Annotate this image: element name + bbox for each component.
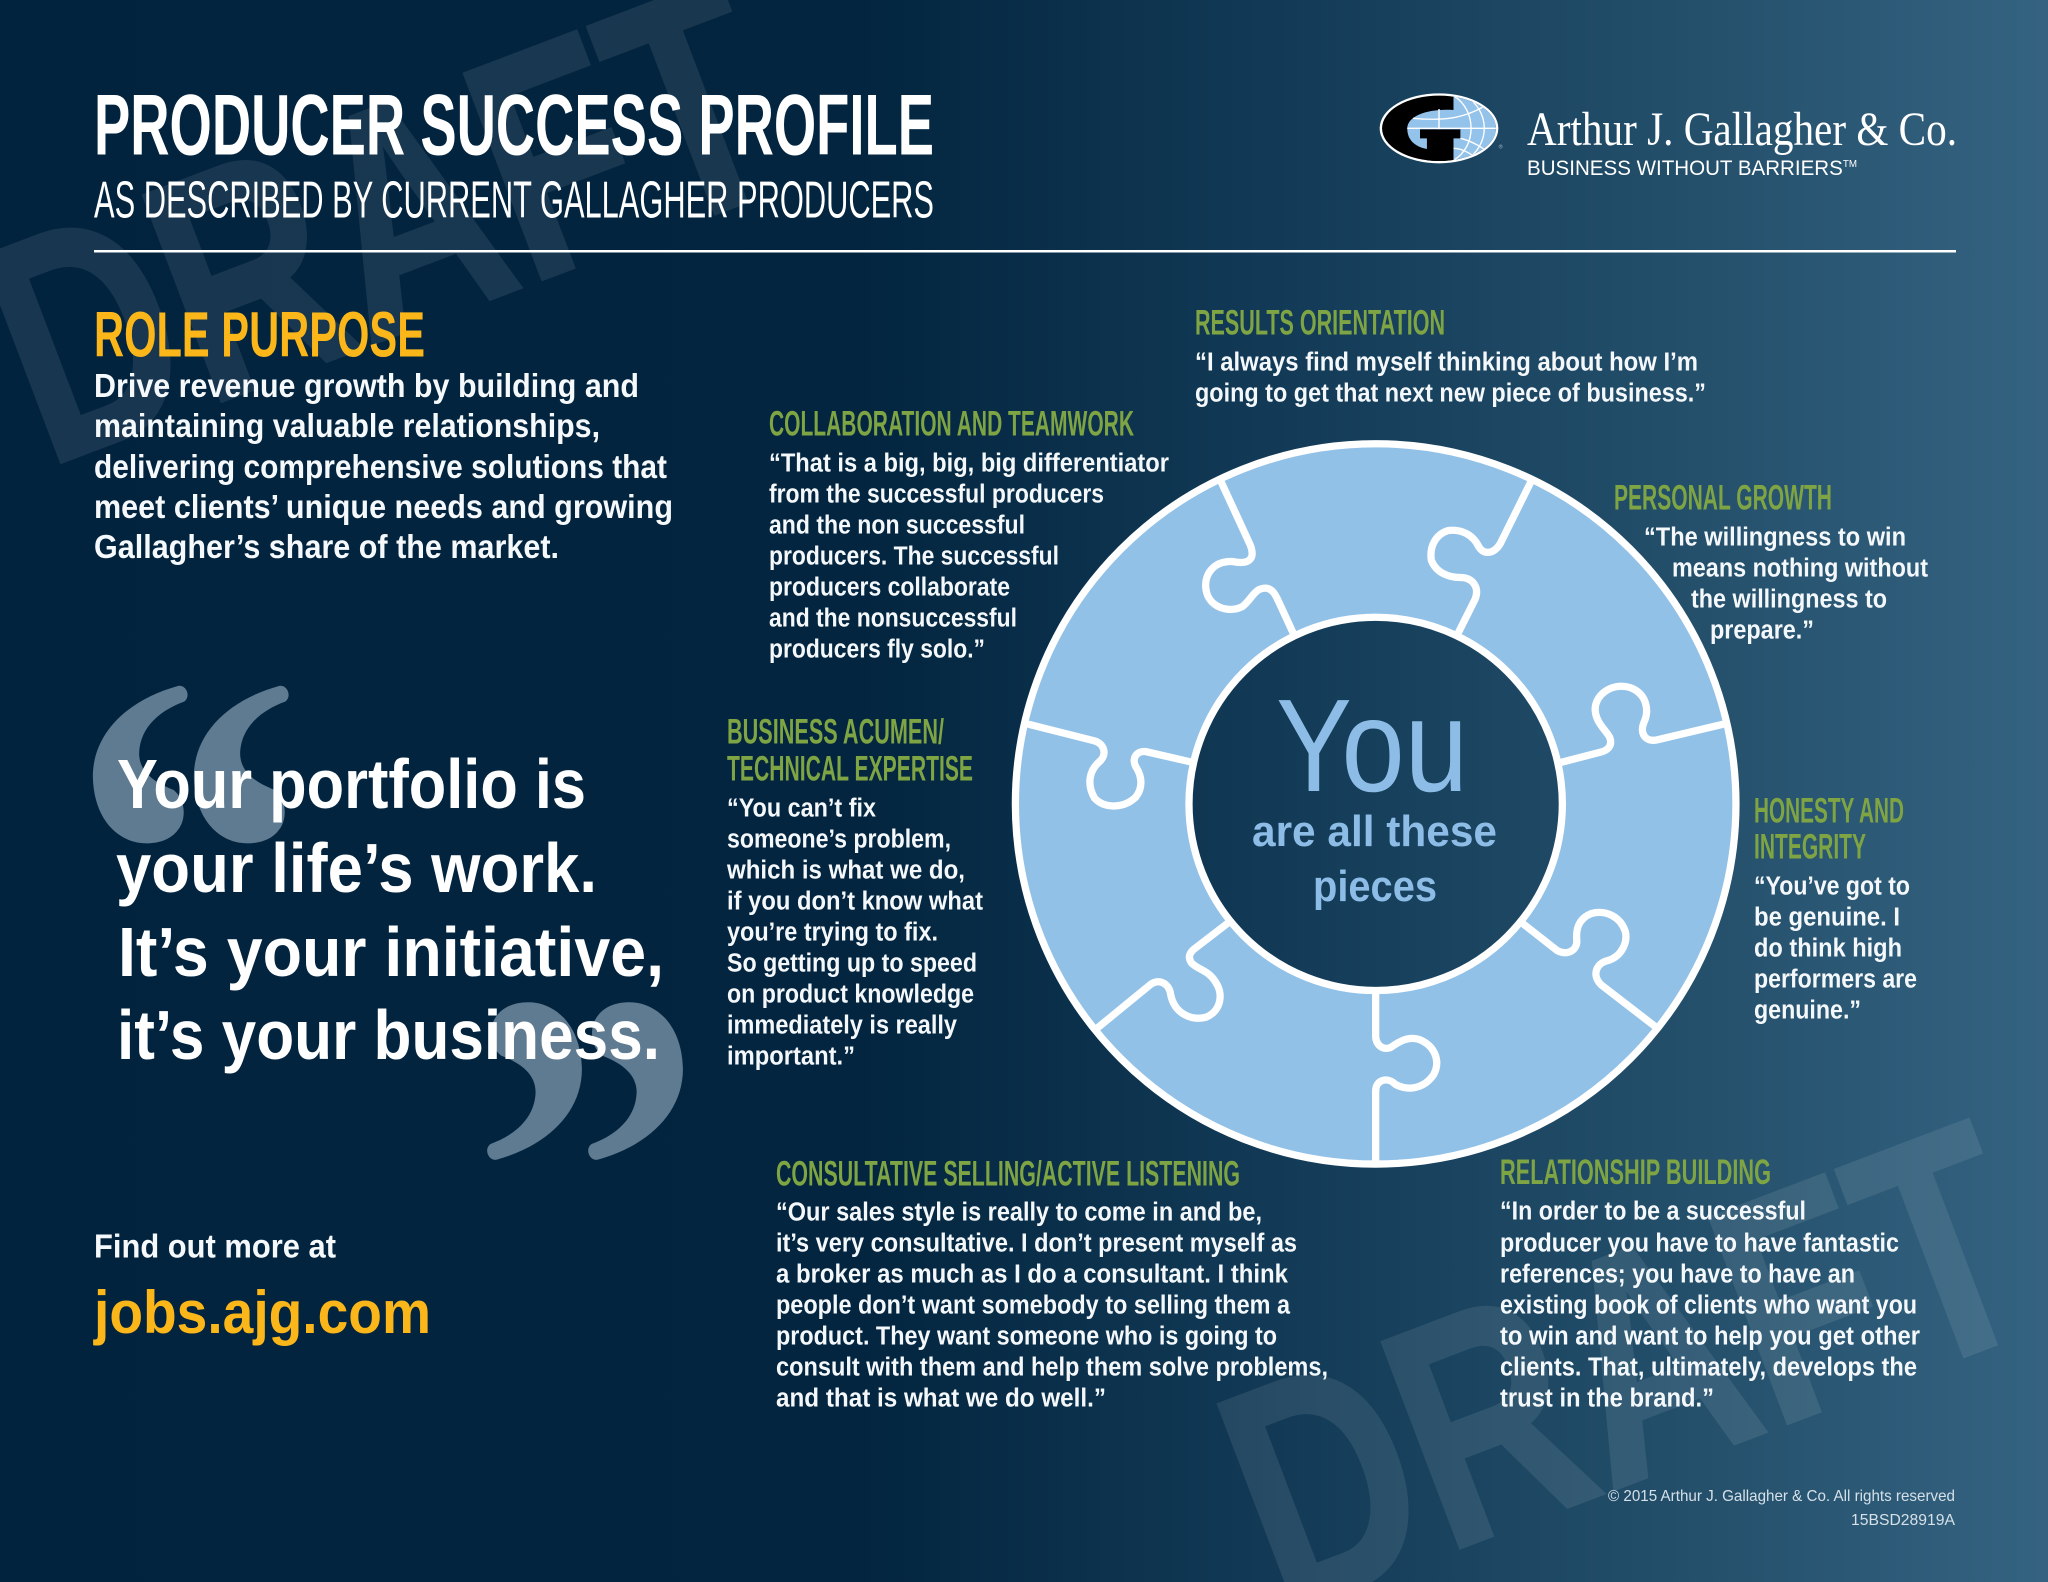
quote: prepare.” <box>1710 616 1814 644</box>
quote text <box>116 745 664 1074</box>
are all these: are all these <box>1252 807 1497 856</box>
quote <box>726 794 983 1070</box>
role purpose text: delivering comprehensive solutions that <box>94 448 667 485</box>
role purpose text: meet clients’ unique needs and growing <box>94 488 673 525</box>
quote: you’re trying to fix. <box>727 918 938 946</box>
icon: closing quote mark <box>487 1002 683 1160</box>
quote: producers. The successful <box>769 542 1059 570</box>
quote: which is what we do, <box>726 856 965 884</box>
tagline: TM <box>1843 159 1857 170</box>
panel: business acumen <box>726 712 983 1070</box>
panel: relationship building <box>1500 1153 1920 1412</box>
you: You <box>1276 672 1468 819</box>
document code: 15BSD28919A <box>1851 1512 1955 1529</box>
quote: on product knowledge <box>727 980 974 1008</box>
quote: from the successful producers <box>769 480 1104 508</box>
tagline: BUSINESS WITHOUT BARRIERS <box>1527 157 1850 180</box>
quote: a broker as much as I do a consultant. I think <box>776 1260 1289 1288</box>
heading: CONSULTATIVE SELLING/ACTIVE LISTENING <box>776 1154 1240 1194</box>
panel: honesty and integrity <box>1754 792 1917 1024</box>
center text <box>1252 672 1497 911</box>
ring pieces <box>1015 444 1736 1164</box>
subtitle: AS DESCRIBED BY CURRENT GALLAGHER PRODUCERS <box>94 172 934 230</box>
quote: to win and want to help you get other <box>1500 1322 1920 1350</box>
website link: jobs.ajg.com <box>93 1279 431 1346</box>
quote <box>776 1198 1328 1412</box>
icon: G globe mark: ® <box>1499 143 1503 150</box>
role purpose text <box>94 367 673 565</box>
heading <box>727 712 973 788</box>
quote: and the non successful <box>769 511 1025 539</box>
heading: BUSINESS ACUMEN/ <box>727 712 944 752</box>
quote: “That is a big, big, big differentiator <box>769 449 1169 477</box>
quote: “You can’t fix <box>727 794 876 822</box>
quote: “You’ve got to <box>1754 872 1910 900</box>
quote: So getting up to speed <box>727 949 977 977</box>
quote <box>1195 348 1706 407</box>
panel: results orientation <box>1195 304 1706 407</box>
pieces: pieces <box>1313 862 1437 911</box>
panel: pull quote <box>93 686 683 1160</box>
quote: people don’t want somebody to selling them a <box>776 1291 1291 1319</box>
puzzle ring <box>1015 444 1736 1164</box>
quote: “Our sales style is really to come in and be, <box>776 1198 1262 1226</box>
quote: important.” <box>727 1042 855 1070</box>
quote: do think high <box>1754 934 1902 962</box>
quote: performers are <box>1754 965 1917 993</box>
quote: means nothing without <box>1672 554 1928 582</box>
quote: producers fly solo.” <box>769 635 985 663</box>
panel: consultative selling <box>776 1154 1328 1412</box>
heading: TECHNICAL EXPERTISE <box>727 750 973 788</box>
role purpose text: Drive revenue growth by building and <box>94 367 639 404</box>
icon: opening quote mark <box>93 686 289 843</box>
footer <box>1608 1488 1955 1529</box>
heading: RESULTS ORIENTATION <box>1195 304 1445 342</box>
quote: immediately is really <box>727 1011 958 1039</box>
heading <box>1754 792 1904 866</box>
quote: “In order to be a successful <box>1500 1197 1806 1225</box>
quote: the willingness to <box>1691 585 1887 613</box>
quote: clients. That, ultimately, develops the <box>1500 1353 1917 1381</box>
icon: G globe mark <box>1380 92 1503 168</box>
quote: product. They want someone who is going to <box>776 1322 1277 1350</box>
heading: INTEGRITY <box>1754 828 1866 866</box>
heading: role purpose: ROLE PURPOSE <box>94 298 425 370</box>
panel: collaboration and teamwork <box>769 404 1169 663</box>
quote: someone’s problem, <box>727 825 951 853</box>
quote: it’s very consultative. I don’t present myself as <box>776 1229 1297 1257</box>
quote: “The willingness to win <box>1644 523 1906 551</box>
quote: if you don’t know what <box>727 887 983 915</box>
quote <box>1644 523 1928 644</box>
quote <box>1754 872 1917 1024</box>
quote: existing book of clients who want you <box>1500 1291 1917 1319</box>
quote: references; you have to have an <box>1500 1260 1855 1288</box>
quote: producer you have to have fantastic <box>1500 1229 1899 1257</box>
puzzle seams <box>1029 481 1722 1162</box>
quote text: your life’s work. <box>116 829 597 907</box>
quote: trust in the brand.” <box>1500 1384 1714 1412</box>
heading: RELATIONSHIP BUILDING <box>1500 1153 1771 1192</box>
title: PRODUCER SUCCESS PROFILE <box>94 78 934 174</box>
quote <box>769 449 1169 663</box>
quote text: it’s your business. <box>117 996 660 1074</box>
company name: Arthur J. Gallagher & Co. <box>1527 103 1957 156</box>
quote: going to get that next new piece of business.” <box>1195 379 1706 407</box>
quote: “I always find myself thinking about how I’m <box>1195 348 1698 376</box>
call to action <box>93 1228 431 1346</box>
quote: genuine.” <box>1754 996 1861 1024</box>
quote text: It’s your initiative, <box>118 913 664 991</box>
copyright: © 2015 Arthur J. Gallagher & Co. All rights reserved <box>1608 1488 1955 1505</box>
quote: and the nonsuccessful <box>769 604 1017 632</box>
panel: personal growth <box>1614 478 1928 644</box>
heading: COLLABORATION AND TEAMWORK <box>769 404 1134 444</box>
logo: Gallagher <box>1380 92 1957 180</box>
quote: and that is what we do well.” <box>776 1384 1106 1412</box>
heading: HONESTY AND <box>1754 792 1904 830</box>
quote text: Your portfolio is <box>117 745 586 823</box>
quote: producers collaborate <box>769 573 1010 601</box>
heading: PERSONAL GROWTH <box>1614 478 1832 518</box>
quote: consult with them and help them solve problems, <box>776 1353 1328 1381</box>
panel: role purpose <box>94 298 673 565</box>
find out more: Find out more at <box>94 1228 336 1265</box>
quote: be genuine. I <box>1754 903 1900 931</box>
role purpose text: Gallagher’s share of the market. <box>94 528 559 565</box>
role purpose text: maintaining valuable relationships, <box>94 407 600 444</box>
quote <box>1500 1197 1920 1412</box>
